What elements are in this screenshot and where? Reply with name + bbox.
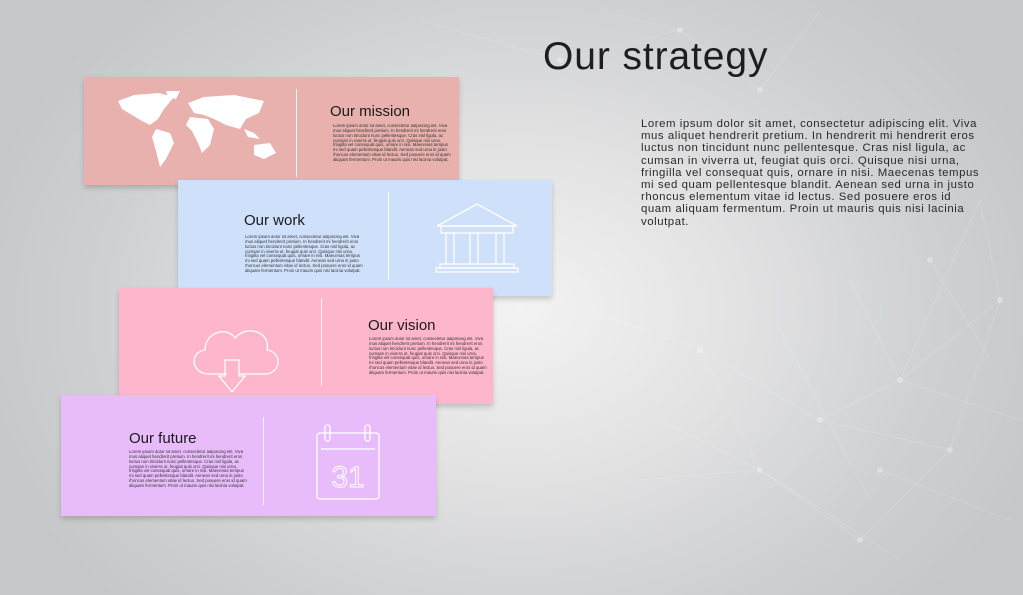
panel: our vision — [119, 288, 493, 404]
title: Our strategy — [543, 35, 768, 78]
divider — [321, 298, 322, 386]
icon: world map — [118, 91, 276, 167]
heading: Our mission — [330, 103, 410, 120]
intro paragraph: quam aliquam fermentum. Proin ut mauris quis nisi lacinia — [641, 203, 964, 215]
intro paragraph: volutpat. — [641, 216, 689, 228]
intro paragraph: luctus non tincidunt nunc pellentesque. Cras nisl ligula, ac — [641, 142, 966, 154]
heading: Our future — [129, 430, 197, 447]
icon: cloud download — [194, 330, 279, 392]
intro paragraph: fringilla vel consequat quis, ornare in nisi. Maecenas tempus — [641, 167, 979, 179]
intro paragraph: mus aliquet hendrerit pretium. In hendrerit mi hendrerit eros — [641, 130, 975, 142]
intro paragraph — [641, 118, 979, 228]
panel: our mission — [84, 77, 459, 185]
intro paragraph: rhoncus elementum vitae id lectus. Sed posuere eros id — [641, 191, 951, 203]
intro paragraph: mi sed quam pellentesque blandit. Aenean sed urna in justo — [641, 179, 974, 191]
divider — [296, 89, 297, 177]
heading: Our work — [244, 212, 305, 229]
divider — [263, 417, 264, 505]
divider — [388, 192, 389, 280]
intro paragraph: cumsan in viverra ut, feugiat quis orci. Quisque nisi urna, — [641, 155, 960, 167]
panel: our future — [61, 395, 436, 516]
icon: calendar 31: 31 — [331, 461, 365, 494]
intro paragraph: Lorem ipsum dolor sit amet, consectetur adipiscing elit. Viva — [641, 118, 977, 130]
panel: our work — [178, 180, 552, 296]
body text: Lorem ipsum dolor sit amet, consectetur adipiscing elit. Viva mus aliquet hendrerit pretium. In hendrerit mi hendrerit eros luctus non tincidunt nunc pellentesque. Cras nisl ligula, ac cumsan in viverra ut, feugiat quis orci. Quisque nisi urna, fringilla vel consequat quis, ornare in nisi. Maecenas tempus mi sed quam pellentesque blandit. Aenean sed urna in justo rhoncus elementum vitae id lectus. Sed posuere eros id quam aliquam fermentum. Proin ut mauris quis nisi lacinia volutpat. — [129, 450, 247, 488]
body text: Lorem ipsum dolor sit amet, consectetur adipiscing elit. Viva mus aliquet hendrerit pretium. In hendrerit mi hendrerit eros luctus non tincidunt nunc pellentesque. Cras nisl ligula, ac cumsan in viverra ut, feugiat quis orci. Quisque nisi urna, fringilla vel consequat quis, ornare in nisi. Maecenas tempus mi sed quam pellentesque blandit. Aenean sed urna in justo rhoncus elementum vitae id lectus. Sed posuere eros id quam aliquam fermentum. Proin ut mauris quis nisi lacinia volutpat. — [369, 337, 487, 375]
icon: calendar 31 — [316, 424, 380, 500]
heading: Our vision — [368, 317, 436, 334]
icon: bank building — [435, 203, 519, 273]
body text: Lorem ipsum dolor sit amet, consectetur adipiscing elit. Viva mus aliquet hendrerit pretium. In hendrerit mi hendrerit eros luctus non tincidunt nunc pellentesque. Cras nisl ligula, ac cumsan in viverra ut, feugiat quis orci. Quisque nisi urna, fringilla vel consequat quis, ornare in nisi. Maecenas tempus mi sed quam pellentesque blandit. Aenean sed urna in justo rhoncus elementum vitae id lectus. Sed posuere eros id quam aliquam fermentum. Proin ut mauris quis nisi lacinia volutpat. — [245, 235, 363, 273]
body text: Lorem ipsum dolor sit amet, consectetur adipiscing elit. Viva mus aliquet hendrerit pretium. In hendrerit mi hendrerit eros luctus non tincidunt nunc pellentesque. Cras nisl ligula, ac cumsan in viverra ut, feugiat quis orci. Quisque nisi urna, fringilla vel consequat quis, ornare in nisi. Maecenas tempus mi sed quam pellentesque blandit. Aenean sed urna in justo rhoncus elementum vitae id lectus. Sed posuere eros id quam aliquam fermentum. Proin ut mauris quis nisi lacinia volutpat. — [333, 124, 451, 162]
